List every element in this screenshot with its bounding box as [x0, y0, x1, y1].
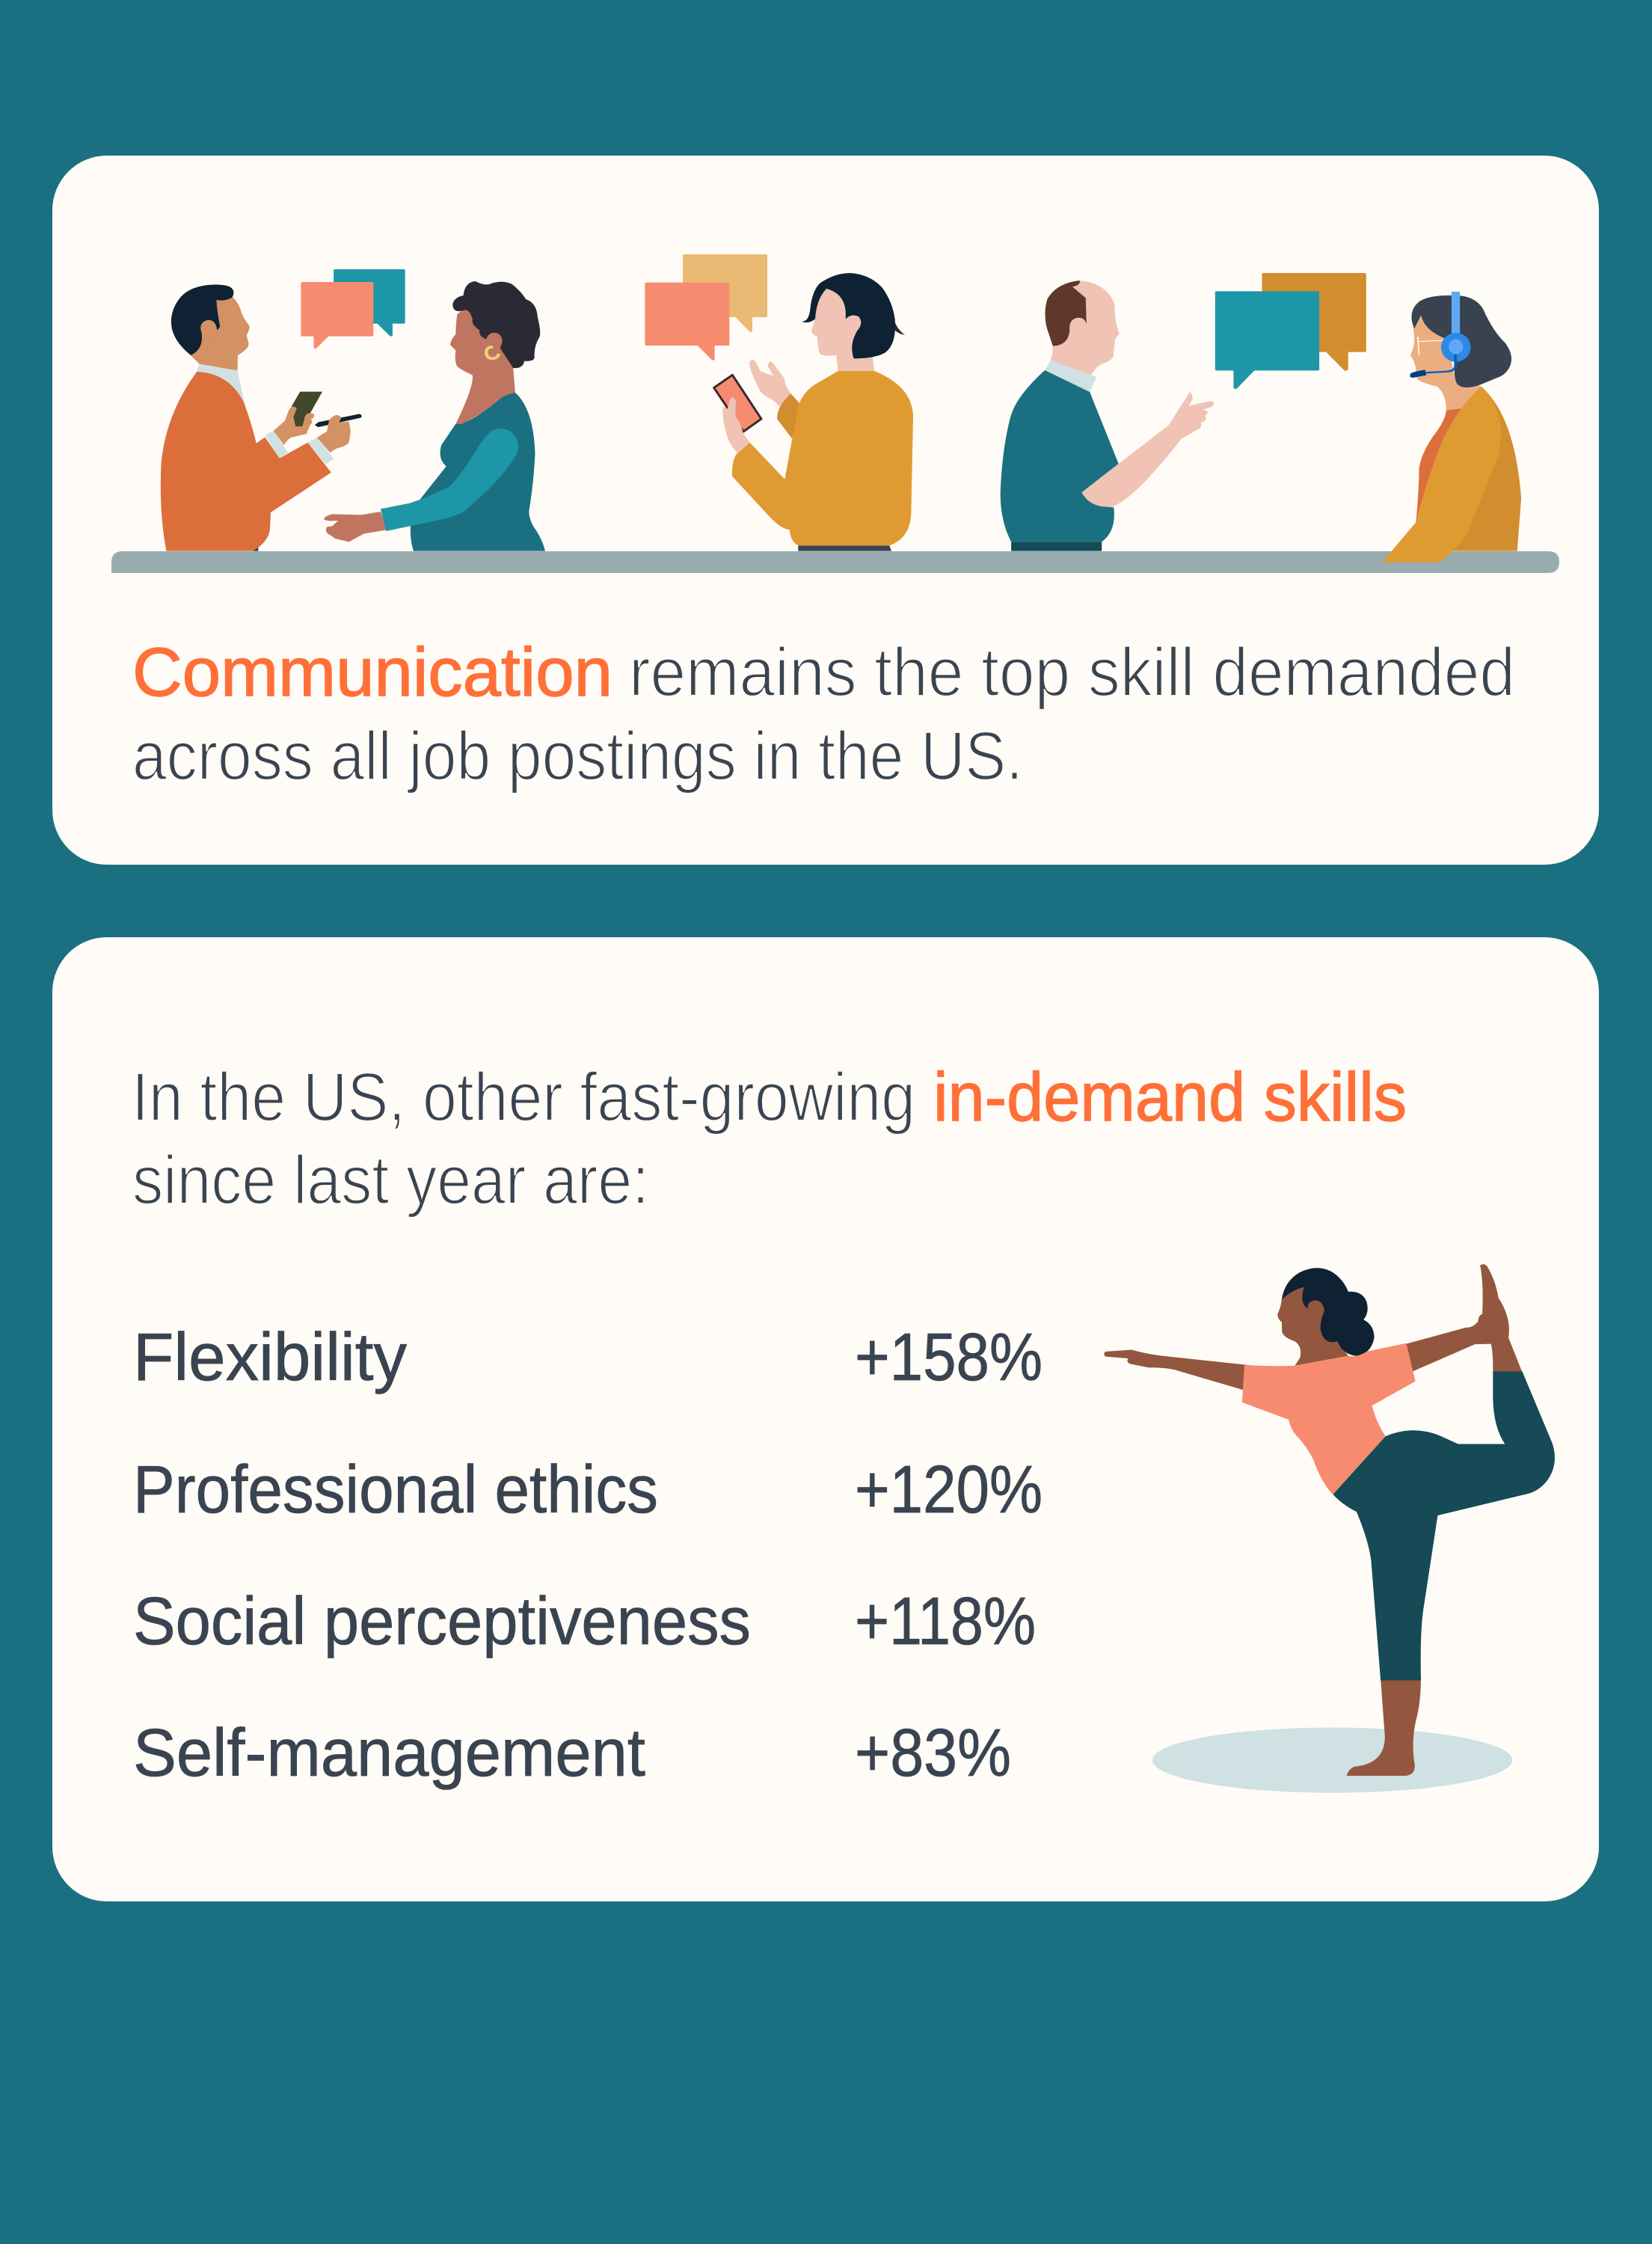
row: Professional ethics: Professional ethics [133, 1453, 658, 1527]
text: communication statement: across all job postings in the US. [132, 718, 1023, 794]
row: Self-management: +83% [855, 1716, 1011, 1791]
text: communication statement: Communication [132, 634, 612, 711]
row: Self-management: Self-management [133, 1716, 645, 1791]
row: Social perceptiveness: +118% [855, 1584, 1036, 1659]
row: Flexibility: +158% [855, 1320, 1043, 1395]
skills list [133, 1320, 1043, 1791]
woman with headset [1382, 292, 1521, 562]
table bar [111, 551, 1559, 573]
woman in yellow sweater [714, 273, 913, 551]
icon: teal speech bubble [1215, 291, 1319, 389]
row: Professional ethics: +120% [855, 1453, 1043, 1527]
floor shadow [1152, 1727, 1512, 1793]
illustration: two people talking with notebook [161, 269, 545, 551]
heading: in-demand skills: In the US, other fast-growing [132, 1059, 915, 1135]
illustration: man and headset agent [1001, 273, 1521, 562]
heading: in-demand skills: in-demand skills [933, 1059, 1407, 1135]
heading: in-demand skills [132, 1059, 1407, 1218]
panel: communication [52, 156, 1599, 865]
row: Self-management [133, 1716, 1011, 1791]
row: Flexibility: Flexibility [133, 1320, 407, 1395]
panel: in-demand skills [52, 937, 1599, 1901]
row: Professional ethics [133, 1453, 1043, 1527]
icon: salmon speech bubble [645, 283, 729, 361]
row: Social perceptiveness: Social perceptiveness [133, 1584, 751, 1659]
icon: ochre speech bubble [1262, 273, 1366, 371]
illustration: woman in yoga dancer pose [1104, 1264, 1555, 1793]
heading: in-demand skills: since last year are: [132, 1142, 649, 1218]
woman in teal top [324, 281, 545, 551]
illustration: woman with phone [645, 254, 913, 551]
icon: teal speech bubble [334, 269, 405, 337]
icon: salmon speech bubble [301, 282, 373, 349]
text: communication statement: remains the top skill demanded [629, 634, 1515, 711]
yoga figure [1104, 1264, 1555, 1776]
text: communication statement [132, 634, 1515, 794]
row: Flexibility [133, 1320, 1043, 1395]
icon: tan speech bubble [683, 254, 767, 332]
man pointing [1001, 280, 1214, 551]
man in orange jacket [161, 285, 362, 551]
